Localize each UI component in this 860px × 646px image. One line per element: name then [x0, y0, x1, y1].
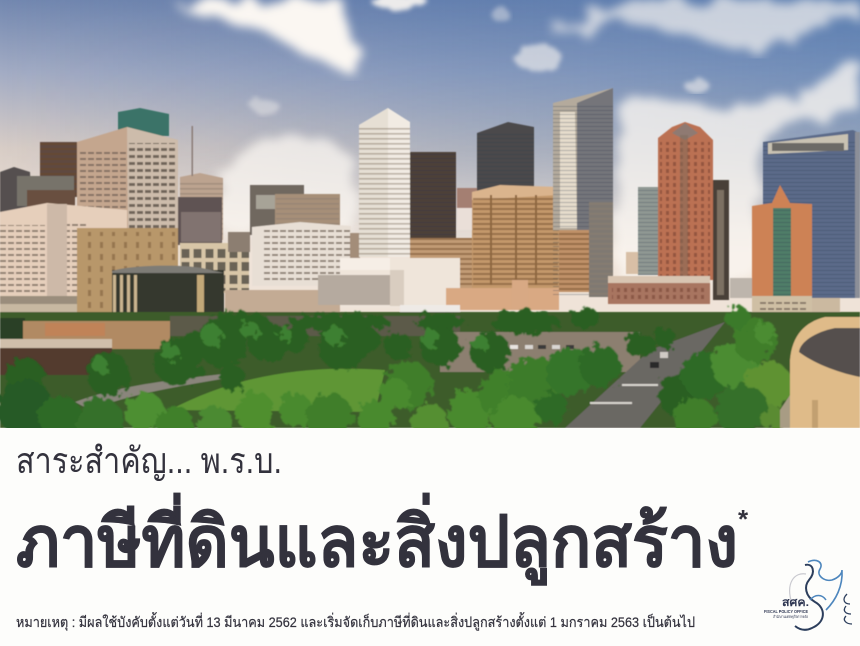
trees: [0, 306, 792, 446]
left buildings: [0, 108, 250, 320]
icon: fiscal policy office logo: FISCAL POLICY OFFICE: [764, 609, 808, 614]
sky: [0, 0, 860, 330]
centre buildings: [225, 108, 559, 317]
subtitle text: สาระสำคัญ... พ.ร.บ.: [16, 440, 282, 481]
text block and logo: [16, 440, 852, 631]
panel: city skyline photo: [0, 0, 860, 428]
icon: fiscal policy office logo: [764, 560, 852, 630]
right buildings: [553, 88, 860, 322]
icon: fiscal policy office logo: สำนักงานเศรษฐกิจการคลัง: [773, 614, 808, 619]
round building foreground: [780, 317, 860, 428]
parked cars: [510, 345, 668, 368]
main title: ภาษีที่ดินและสิ่งปลูกสร้าง: [16, 492, 738, 586]
asterisk: *: [738, 504, 749, 534]
panel: white text area: [0, 428, 860, 646]
icon: fiscal policy office logo: สศค.: [782, 597, 809, 609]
footnote: หมายเหตุ : มีผลใช้บังคับตั้งแต่วันที่ 13 มีนาคม 2562 และเริ่มจัดเก็บภาษีที่ดินและสิ่งปลูกสร้างตั้งแต่ 1 มกราคม 2563 เป็นต้นไป: [16, 612, 695, 631]
clouds: [170, 0, 860, 280]
ground and low buildings: [0, 312, 860, 428]
